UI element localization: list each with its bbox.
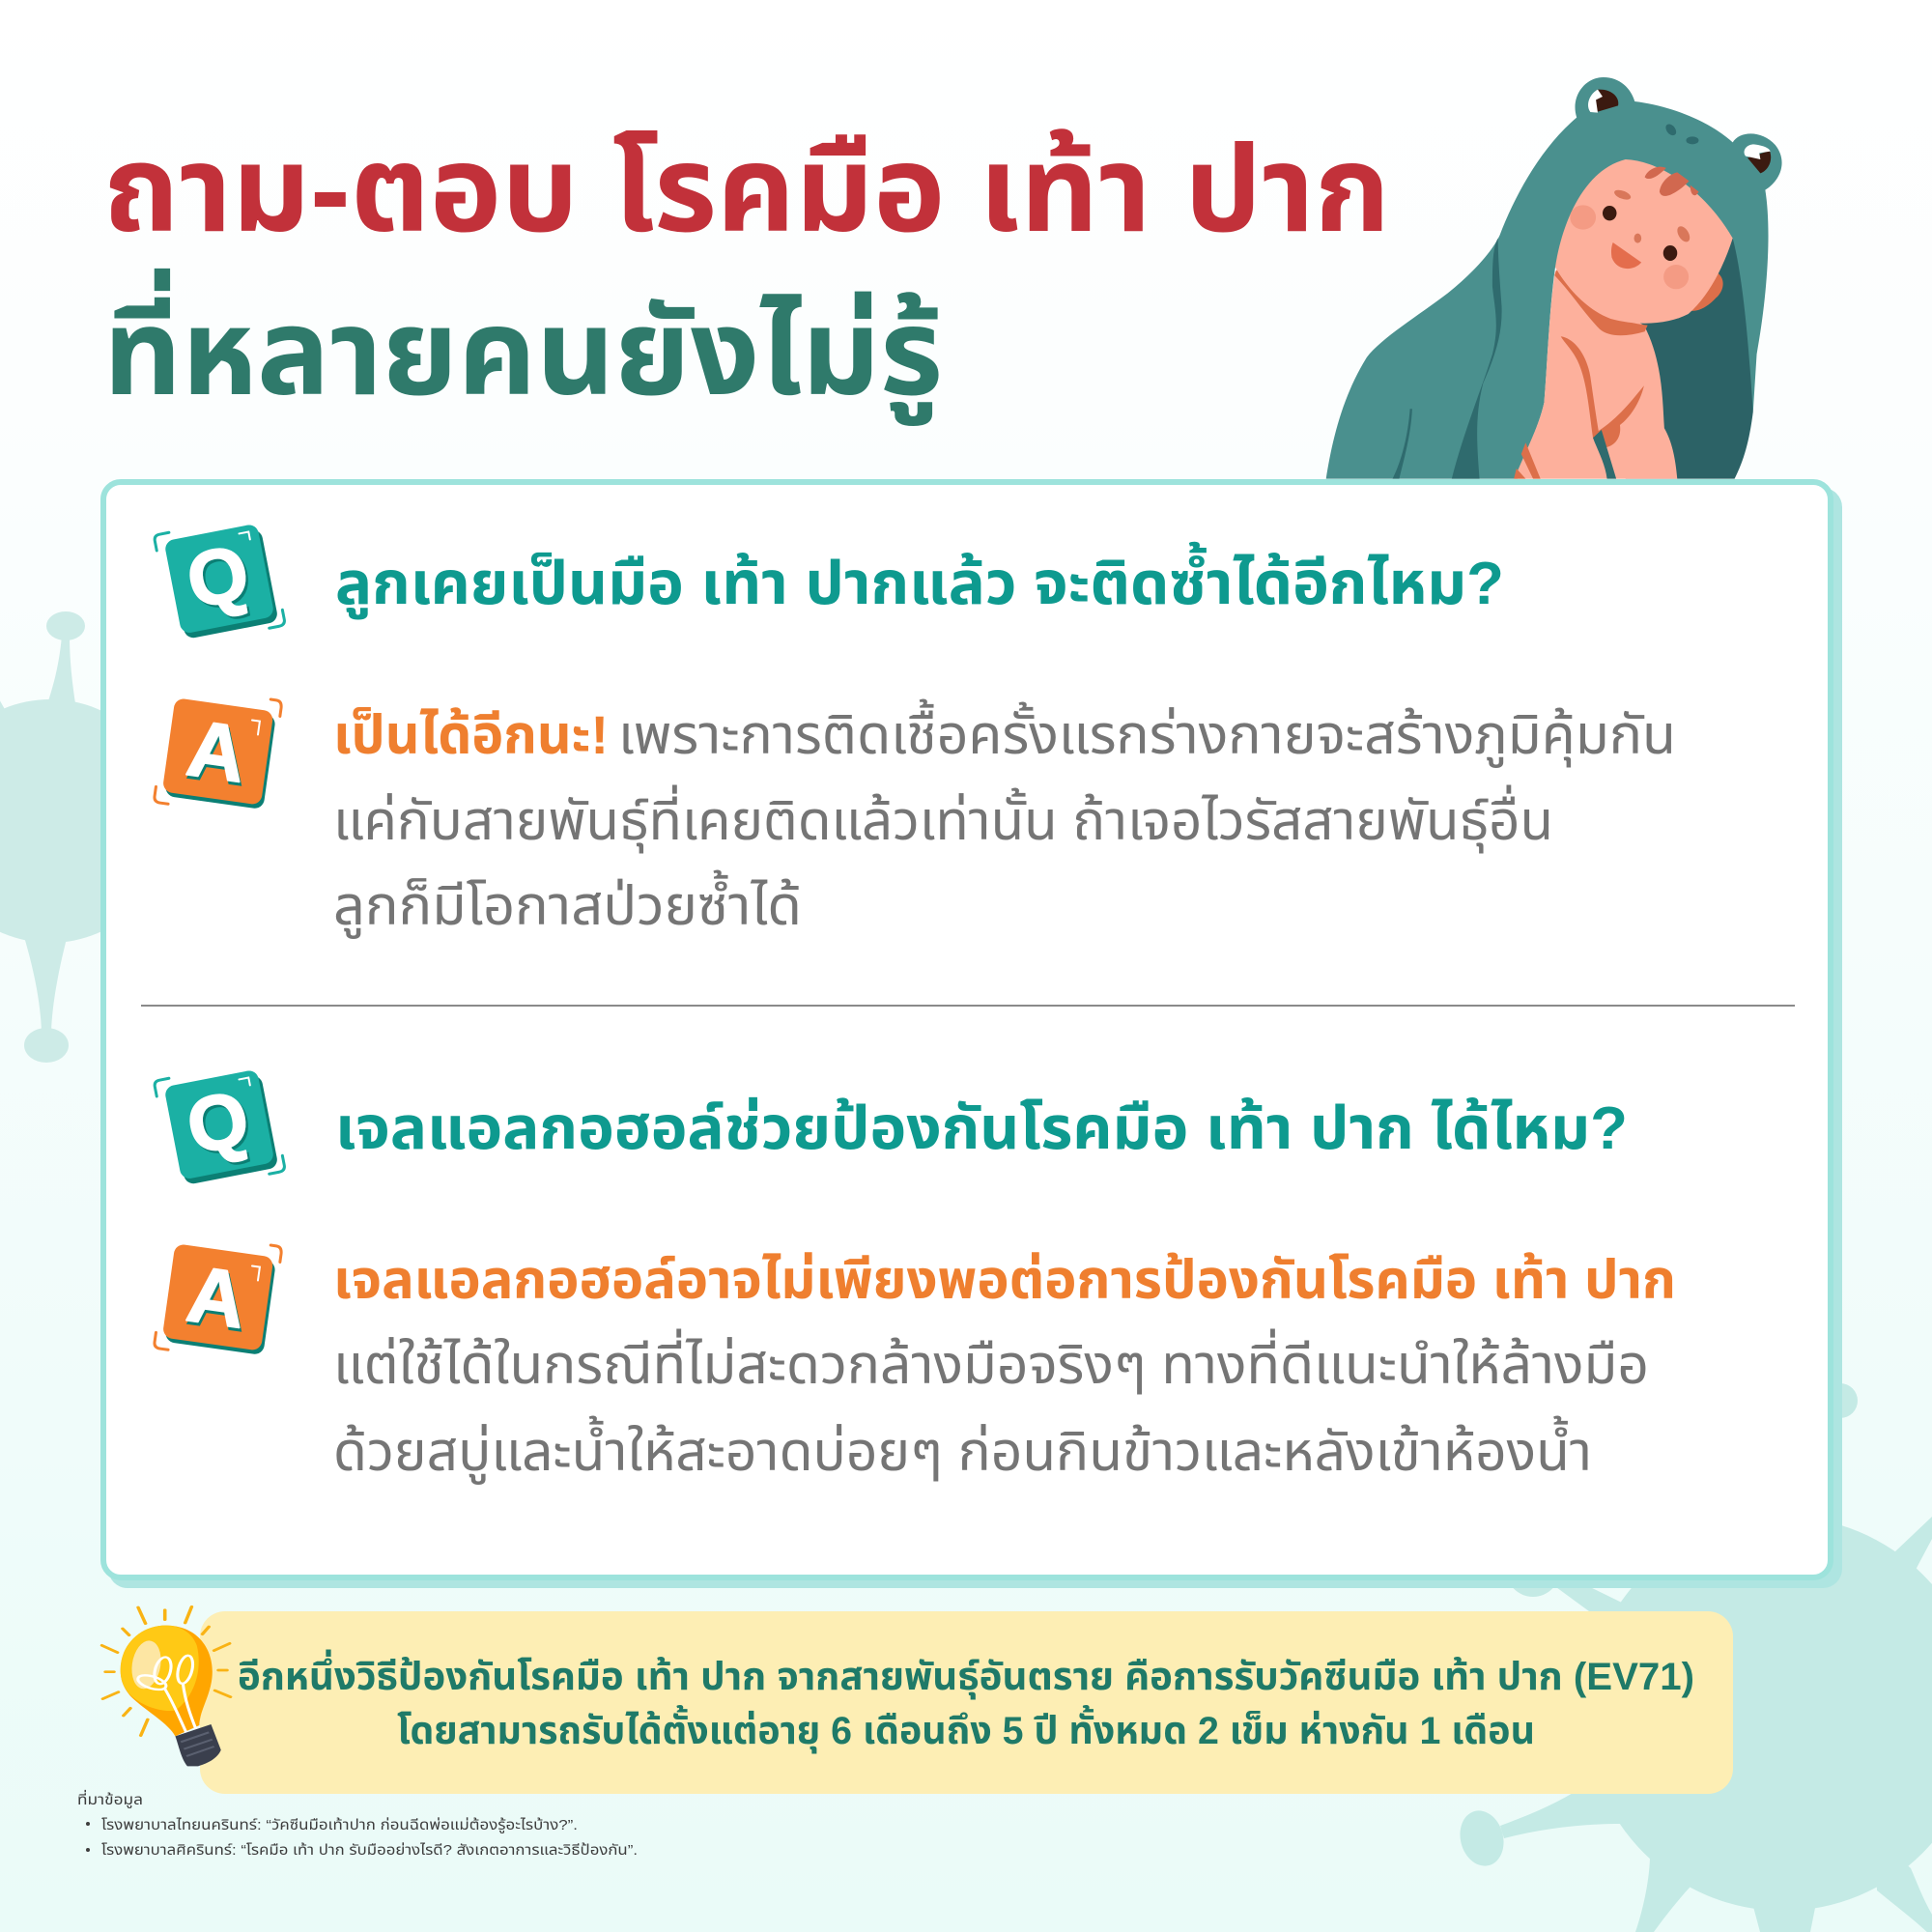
callout line 1: อีกหนึ่งวิธีป้องกันโรคมือ เท้า ปาก จากสายพันธุ์อันตราย คือการรับวัคซีนมือ เท้า ปาก (EV71) xyxy=(238,1649,1694,1700)
question 1: ลูกเคยเป็นมือ เท้า ปากแล้ว จะติดซ้ำได้อีกไหม? xyxy=(335,541,1504,620)
answer 1 line 1: เพราะการติดเชื้อครั้งแรกร่างกายจะสร้างภูมิคุ้มกัน xyxy=(618,698,1676,768)
icon: Q: Q xyxy=(181,528,256,625)
callout line 2: โดยสามารถรับได้ตั้งแต่อายุ 6 เดือนถึง 5 ปี ทั้งหมด 2 เข็ม ห่างกัน 1 เดือน xyxy=(397,1704,1535,1754)
source 1: โรงพยาบาลไทยนครินทร์: “วัคซีนมือเท้าปาก ก่อนฉีดพ่อแม่ต้องรู้อะไรบ้าง?”. xyxy=(101,1816,578,1833)
face xyxy=(1555,159,1733,324)
hood fold xyxy=(1452,239,1502,479)
hood spots xyxy=(1663,123,1678,137)
source 2: โรงพยาบาลศิครินทร์: “โรคมือ เท้า ปาก รับมืออย่างไรดี? สังเกตอาการและวิธีป้องกัน”. xyxy=(101,1841,638,1859)
question 2: เจลแอลกอฮอล์ช่วยป้องกันโรคมือ เท้า ปาก ได้ไหม? xyxy=(335,1095,1628,1162)
section 1 xyxy=(154,514,1676,939)
answer 1 line 3: ลูกก็มีโอกาสป่วยซ้ำได้ xyxy=(333,869,802,939)
icon: A: A xyxy=(182,1250,251,1345)
body markings xyxy=(1561,336,1602,447)
virus: bottom right xyxy=(1454,1383,1932,1932)
answer 2 line 2: แต่ใช้ได้ในกรณีที่ไม่สะดวกล้างมือจริงๆ ทางที่ดีแนะนำให้ล้างมือ xyxy=(333,1328,1649,1395)
icon: A: A xyxy=(184,1253,252,1349)
answer 2 line 3: ด้วยสบู่และน้ำให้สะอาดบ่อยๆ ก่อนกินข้าวและหลังเข้าห้องน้ำ xyxy=(333,1415,1592,1485)
frog eye right xyxy=(1747,151,1771,173)
hair xyxy=(1645,167,1698,196)
answer 1 lead: เป็นได้อีกนะ! xyxy=(333,704,609,765)
answer 1 line 2: แค่กับสายพันธุ์ที่เคยติดแล้วเท่านั้น ถ้าเจอไวรัสสายพันธุ์อื่น xyxy=(333,784,1553,853)
frog eye left xyxy=(1592,90,1618,112)
virus: left xyxy=(0,611,172,1063)
title line 1: ถาม-ตอบ โรคมือ เท้า ปาก xyxy=(103,123,1390,257)
mouth xyxy=(1611,242,1641,269)
eyes xyxy=(1603,206,1617,220)
character: baby in frog hood xyxy=(1326,77,1782,479)
icon: Q: Q xyxy=(183,1077,258,1173)
icon: Q xyxy=(154,1060,285,1192)
answer 2 lead: เจลแอลกอฮอล์อาจไม่เพียงพอต่อการป้องกันโรคมือ เท้า ปาก xyxy=(333,1249,1676,1310)
icon: Q: Q xyxy=(183,531,258,627)
icon: Q: Q xyxy=(181,1074,256,1171)
icon: A xyxy=(154,1231,282,1363)
icon: light bulb xyxy=(102,1606,231,1766)
ear xyxy=(1687,272,1723,311)
card xyxy=(103,482,1842,1588)
cheeks xyxy=(1570,205,1596,230)
sources xyxy=(77,1789,638,1859)
brows and nose xyxy=(1612,188,1692,243)
sources heading: ที่มาข้อมูล xyxy=(77,1789,143,1808)
callout xyxy=(200,1611,1733,1794)
icon: Q xyxy=(154,514,285,646)
icon: A: A xyxy=(182,704,251,799)
icon: A: A xyxy=(184,707,252,803)
body xyxy=(1515,270,1677,479)
hood xyxy=(1326,77,1782,479)
neck shadow xyxy=(1554,269,1648,335)
title line 2: ที่หลายคนยังไม่รู้ xyxy=(103,269,943,426)
rays xyxy=(102,1606,231,1736)
section 2 xyxy=(154,1060,1676,1485)
icon: A xyxy=(154,685,282,817)
hood back dark xyxy=(1607,210,1755,479)
